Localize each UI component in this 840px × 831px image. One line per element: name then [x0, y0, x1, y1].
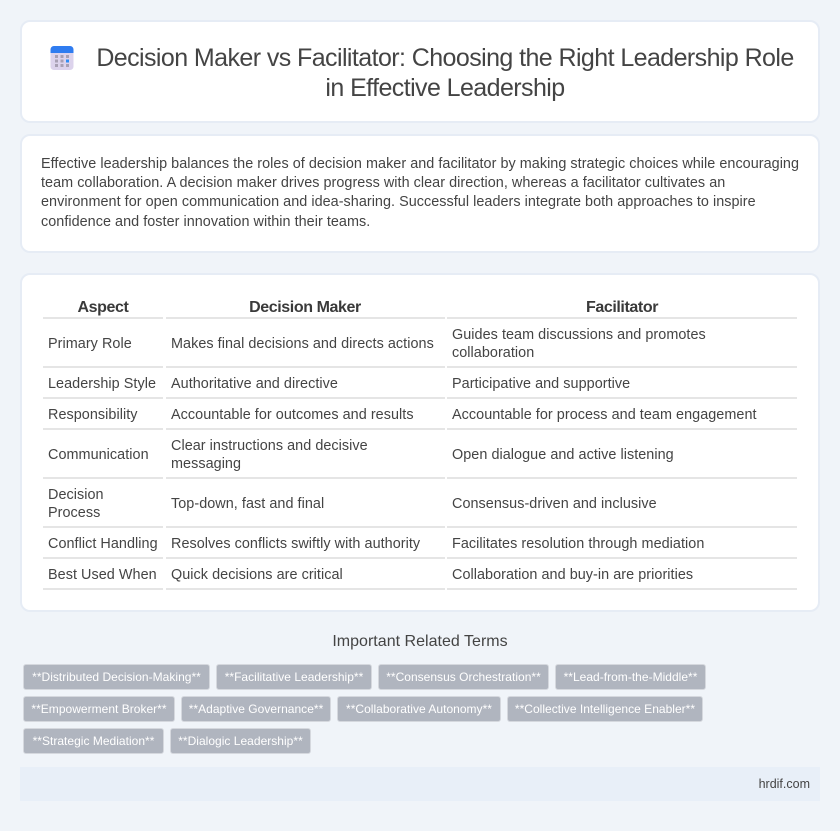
- tag: **Distributed Decision-Making**: [32, 670, 201, 684]
- tag: **Collaborative Autonomy**: [346, 702, 492, 716]
- title: [96, 44, 794, 102]
- tag: [216, 664, 372, 690]
- row: decision process: Decision: [48, 487, 104, 503]
- tag: [170, 728, 311, 754]
- comparison table contents: Accountable for outcomes and results: [171, 407, 414, 423]
- comparison table contents: Authoritative and directive: [171, 376, 338, 392]
- comparison table contents: Top-down, fast and final: [171, 496, 324, 512]
- intro text: [41, 156, 799, 230]
- tag: **Adaptive Governance**: [189, 702, 323, 716]
- tag: [507, 696, 703, 722]
- row: primary role: Primary Role: [48, 336, 132, 352]
- comparison table contents: Facilitates resolution through mediation: [452, 536, 704, 552]
- tag: **Dialogic Leadership**: [178, 734, 303, 748]
- intro text: environment for open communication and idea-sharing. Successful leaders integrate both approaches to inspire: [41, 194, 756, 210]
- row: decision process: Process: [48, 505, 100, 521]
- comparison table contents: Open dialogue and active listening: [452, 447, 674, 463]
- row: decision process: [48, 487, 104, 521]
- icon: calendar: [50, 46, 74, 70]
- intro text: team collaboration. A decision maker drives progress with clear direction, whereas a facilitator cultivates an: [41, 175, 725, 191]
- tag: **Empowerment Broker**: [31, 702, 167, 716]
- tag: **Lead-from-the-Middle**: [564, 670, 697, 684]
- title: Decision Maker vs Facilitator: Choosing the Right Leadership Role: [96, 44, 794, 72]
- tag: **Strategic Mediation**: [33, 734, 154, 748]
- tag: **Collective Intelligence Enabler**: [515, 702, 695, 716]
- comparison table contents: Resolves conflicts swiftly with authority: [171, 536, 420, 552]
- panel: introduction: [20, 134, 820, 253]
- tag: [181, 696, 331, 722]
- panel: comparison table: [20, 273, 820, 612]
- heading: related terms: Important Related Terms: [332, 633, 508, 650]
- comparison table contents: Participative and supportive: [452, 376, 630, 392]
- tag: [378, 664, 549, 690]
- comparison table contents: Quick decisions are critical: [171, 567, 343, 583]
- comparison table contents: Consensus-driven and inclusive: [452, 496, 657, 512]
- title: in Effective Leadership: [325, 74, 565, 102]
- header: decision maker: Decision Maker: [249, 299, 361, 316]
- row: communication: Communication: [48, 447, 149, 463]
- comparison table contents: Accountable for process and team engagement: [452, 407, 757, 423]
- footer bar: [20, 767, 820, 801]
- tag: **Consensus Orchestration**: [386, 670, 541, 684]
- comparison table contents: Makes final decisions and directs actions: [171, 336, 434, 352]
- row: best used when: Best Used When: [48, 567, 157, 583]
- comparison table contents: Clear instructions and decisive: [171, 438, 368, 454]
- comparison table contents: [43, 299, 797, 590]
- comparison table contents: Collaboration and buy-in are priorities: [452, 567, 693, 583]
- comparison table contents: collaboration: [452, 345, 534, 361]
- row: responsibility: Responsibility: [48, 407, 137, 423]
- intro text: Effective leadership balances the roles of decision maker and facilitator by making strategic choices while encouraging: [41, 156, 799, 172]
- row: conflict handling: Conflict Handling: [48, 536, 158, 552]
- tag: **Facilitative Leadership**: [225, 670, 363, 684]
- row: leadership style: Leadership Style: [48, 376, 156, 392]
- comparison table contents: messaging: [171, 456, 241, 472]
- tag: [337, 696, 501, 722]
- footer credit: hrdif.com: [759, 777, 810, 791]
- comparison table contents: Guides team discussions and promotes: [452, 327, 706, 343]
- tag: [555, 664, 706, 690]
- header: aspect: Aspect: [78, 299, 128, 316]
- related term tags: [23, 664, 706, 754]
- intro text: confidence and foster innovation within their teams.: [41, 214, 370, 230]
- tag: [23, 664, 210, 690]
- tag: [23, 728, 164, 754]
- tag: [23, 696, 175, 722]
- header: facilitator: Facilitator: [586, 299, 658, 316]
- header card: [20, 20, 820, 123]
